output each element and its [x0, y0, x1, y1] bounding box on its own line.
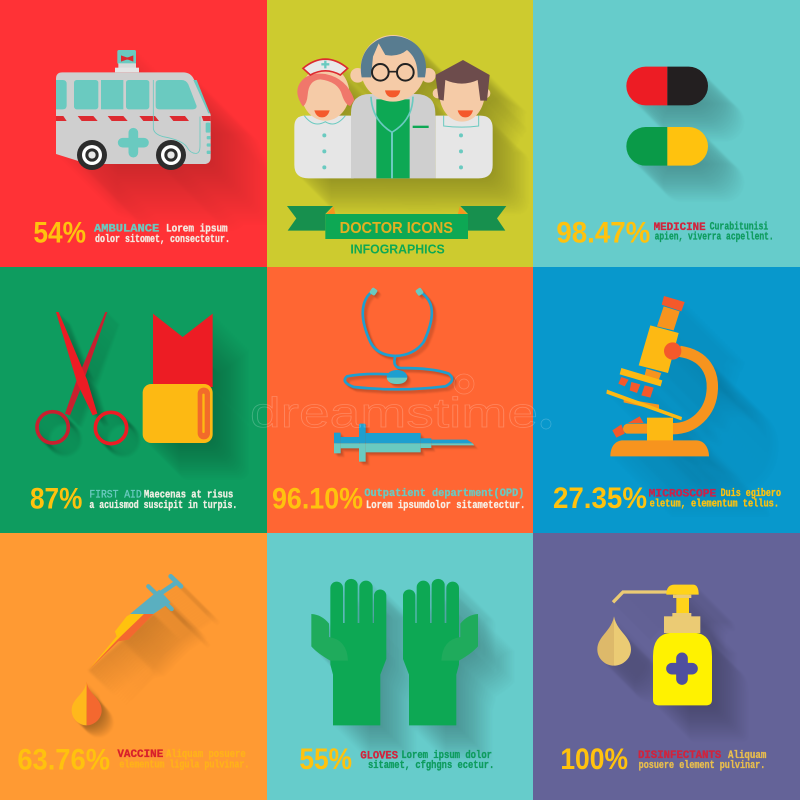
icon: soap dispenser — [613, 585, 712, 705]
stat: outpatient department: Outpatient department(OPD) — [364, 488, 524, 500]
panel: medicine — [533, 0, 800, 267]
stat: vaccine: elementum ligula pulvinar. — [119, 759, 249, 771]
stat: vaccine — [17, 744, 249, 777]
icon: microscope — [606, 296, 712, 456]
stat: ambulance: dolor sitomet, consectetur. — [95, 234, 230, 246]
stat: disinfectants: Aliquam — [728, 750, 766, 762]
stat: ambulance — [33, 217, 230, 250]
title: DOCTOR ICONS — [340, 220, 453, 237]
panel: disinfectants — [533, 533, 800, 800]
stat: medicine — [556, 216, 774, 249]
subtitle: INFOGRAPHICS — [350, 242, 445, 257]
stat: microscope: 27.35% — [553, 482, 647, 515]
icon: ambulance — [56, 50, 211, 170]
banner: title ribbon — [287, 206, 506, 239]
icon: capsules — [626, 67, 708, 166]
panel: outpatient department — [267, 267, 534, 534]
watermark — [250, 374, 551, 436]
stat: gloves: GLOVES — [360, 751, 399, 763]
stat: ambulance: Lorem ipsum — [166, 224, 228, 236]
icon: right glove — [403, 579, 478, 725]
icon: vaccine syringe — [88, 576, 181, 670]
stat: first aid: Maecenas at risus — [144, 490, 233, 502]
stat: disinfectants: posuere element pulvinar. — [639, 760, 765, 772]
panel: microscope — [533, 267, 800, 534]
stat: first aid: 87% — [30, 483, 82, 516]
stat: microscope: Duis egibero — [721, 488, 781, 500]
stat: first aid: FIRST AID — [89, 490, 142, 502]
stat: vaccine: 63.76% — [17, 744, 110, 777]
stat: vaccine: VACCINE — [117, 749, 163, 761]
icon: green and yellow capsule — [626, 127, 708, 166]
panel: ambulance — [0, 0, 267, 267]
icon: gloves — [311, 579, 478, 725]
stat: disinfectants: 100% — [560, 743, 628, 776]
stat: gloves — [299, 743, 494, 776]
stat: ambulance: AMBULANCE — [94, 224, 159, 236]
icon: soap dispenser and drop — [597, 585, 712, 705]
stat: disinfectants: DISINFECTANTS — [638, 750, 722, 762]
stat: outpatient department: 96.10% — [272, 483, 363, 516]
watermark: dreamstime — [250, 389, 538, 436]
stat: microscope: MICROSCOPE — [649, 488, 716, 500]
stat: outpatient department: Lorem ipsumdolor sitametectur. — [366, 500, 525, 512]
icon: stethoscope — [345, 287, 452, 389]
stat: microscope — [553, 482, 781, 515]
icon: scissors — [37, 312, 127, 444]
stat: gloves: Lorem ipsum dolor — [401, 750, 492, 762]
panel: doctors and title — [267, 0, 534, 267]
stat: medicine: Curabitunisi — [710, 221, 768, 233]
stat: vaccine: Aliquam posuere — [166, 749, 246, 761]
stat: disinfectants — [560, 743, 766, 776]
stat: gloves: sitamet, cfghgns ecetur. — [368, 760, 494, 772]
stat: ambulance: 54% — [33, 217, 86, 250]
panel: first aid — [0, 267, 267, 534]
stat: first aid — [30, 483, 237, 516]
icon: bandage — [143, 314, 213, 443]
icon: senior doctor — [350, 35, 436, 178]
icon: soap drop — [597, 616, 631, 666]
panel: gloves — [267, 533, 534, 800]
icon: man doctor — [433, 60, 493, 178]
icon: drop — [72, 681, 102, 725]
icon: nurse — [294, 59, 354, 178]
icon: left glove — [311, 579, 386, 725]
icon: syringe — [334, 424, 474, 462]
panel: vaccine — [0, 533, 267, 800]
stat: outpatient department — [272, 483, 525, 516]
stat: medicine: 98.47% — [556, 216, 650, 249]
stat: first aid: a acuismod suscipit in turpis. — [89, 500, 237, 512]
icon: medical team — [294, 35, 493, 178]
stat: gloves: 55% — [299, 743, 352, 776]
icon: red and black capsule — [626, 67, 708, 105]
stat: medicine: MEDICINE — [654, 222, 706, 234]
